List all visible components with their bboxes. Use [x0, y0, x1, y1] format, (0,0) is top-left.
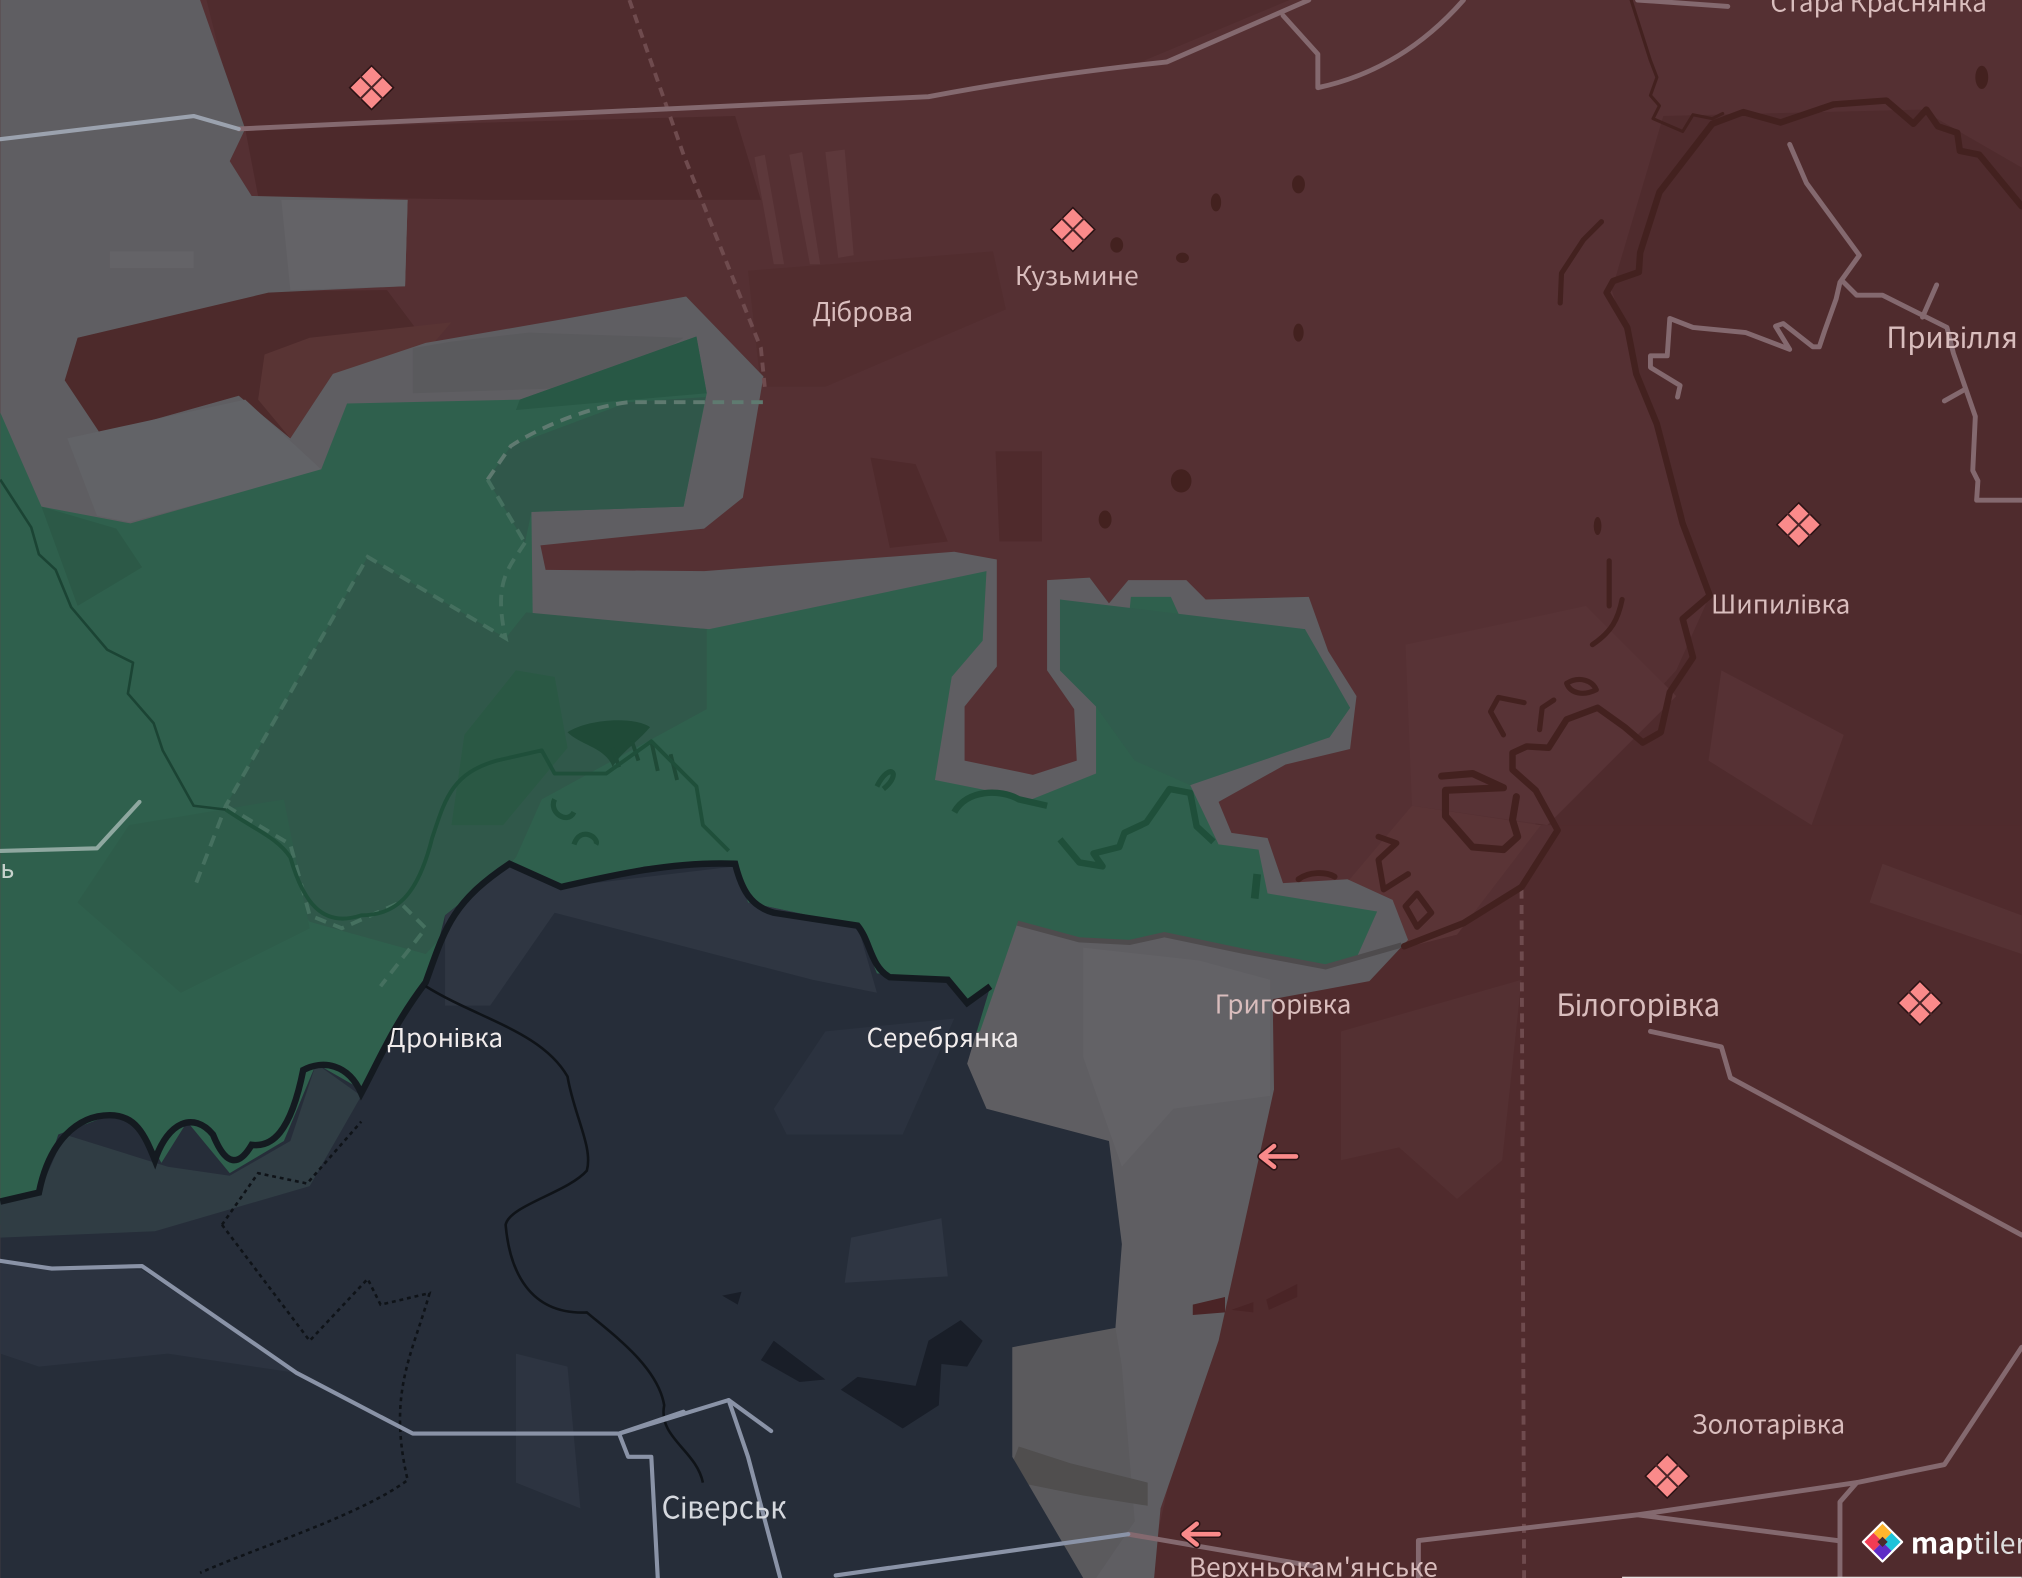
attack diamond marker 2 — [1051, 208, 1095, 251]
label: Дронівка: Дронівка — [387, 1018, 503, 1055]
attack diamond marker 5 — [1645, 1454, 1689, 1498]
label: Привілля: Привілля — [1886, 314, 2018, 357]
logo: maptiler — [1863, 1522, 2022, 1563]
label: Білогорівка: Білогорівка — [1556, 980, 1720, 1025]
gray zone shading — [67, 200, 1270, 1578]
green texture — [42, 336, 1350, 993]
label: Сіверськ: Сіверськ — [662, 1483, 787, 1528]
ponds — [1099, 66, 1988, 1315]
government-held river — [200, 986, 703, 1573]
river: green sector — [0, 480, 1257, 919]
river: occupied sector — [1298, 0, 2022, 946]
label: Золотарівка: Золотарівка — [1692, 1405, 1845, 1442]
label: Серебрянка: Серебрянка — [867, 1018, 1019, 1055]
frontline edge — [0, 863, 990, 1202]
bottom edge strip — [1622, 1577, 2022, 1578]
attack diamond marker 3 — [1777, 503, 1821, 547]
label: Шипилівка: Шипилівка — [1711, 585, 1850, 622]
label: Діброва: Діброва — [812, 292, 913, 329]
attack diamond marker 4 — [1898, 981, 1942, 1025]
gray zone — [0, 0, 1408, 1578]
dark zone texture — [0, 866, 983, 1508]
roads: government-held — [0, 116, 1128, 1578]
attack diamond marker 1 — [350, 66, 393, 110]
controlled territory — [0, 336, 1377, 1225]
logo mark — [1863, 1523, 1902, 1561]
occupied dashed roads — [629, 0, 1524, 1578]
label: clipped letter: ь — [0, 849, 14, 886]
government-held territory — [0, 864, 1122, 1578]
south gray line — [1017, 923, 1402, 967]
label: Кузьмине: Кузьмине — [1015, 256, 1139, 293]
arrow 2 — [1184, 1524, 1219, 1544]
label: Григорівка: Григорівка — [1215, 984, 1351, 1021]
green dashed roads — [194, 402, 763, 986]
arrow 1 — [1261, 1146, 1296, 1167]
